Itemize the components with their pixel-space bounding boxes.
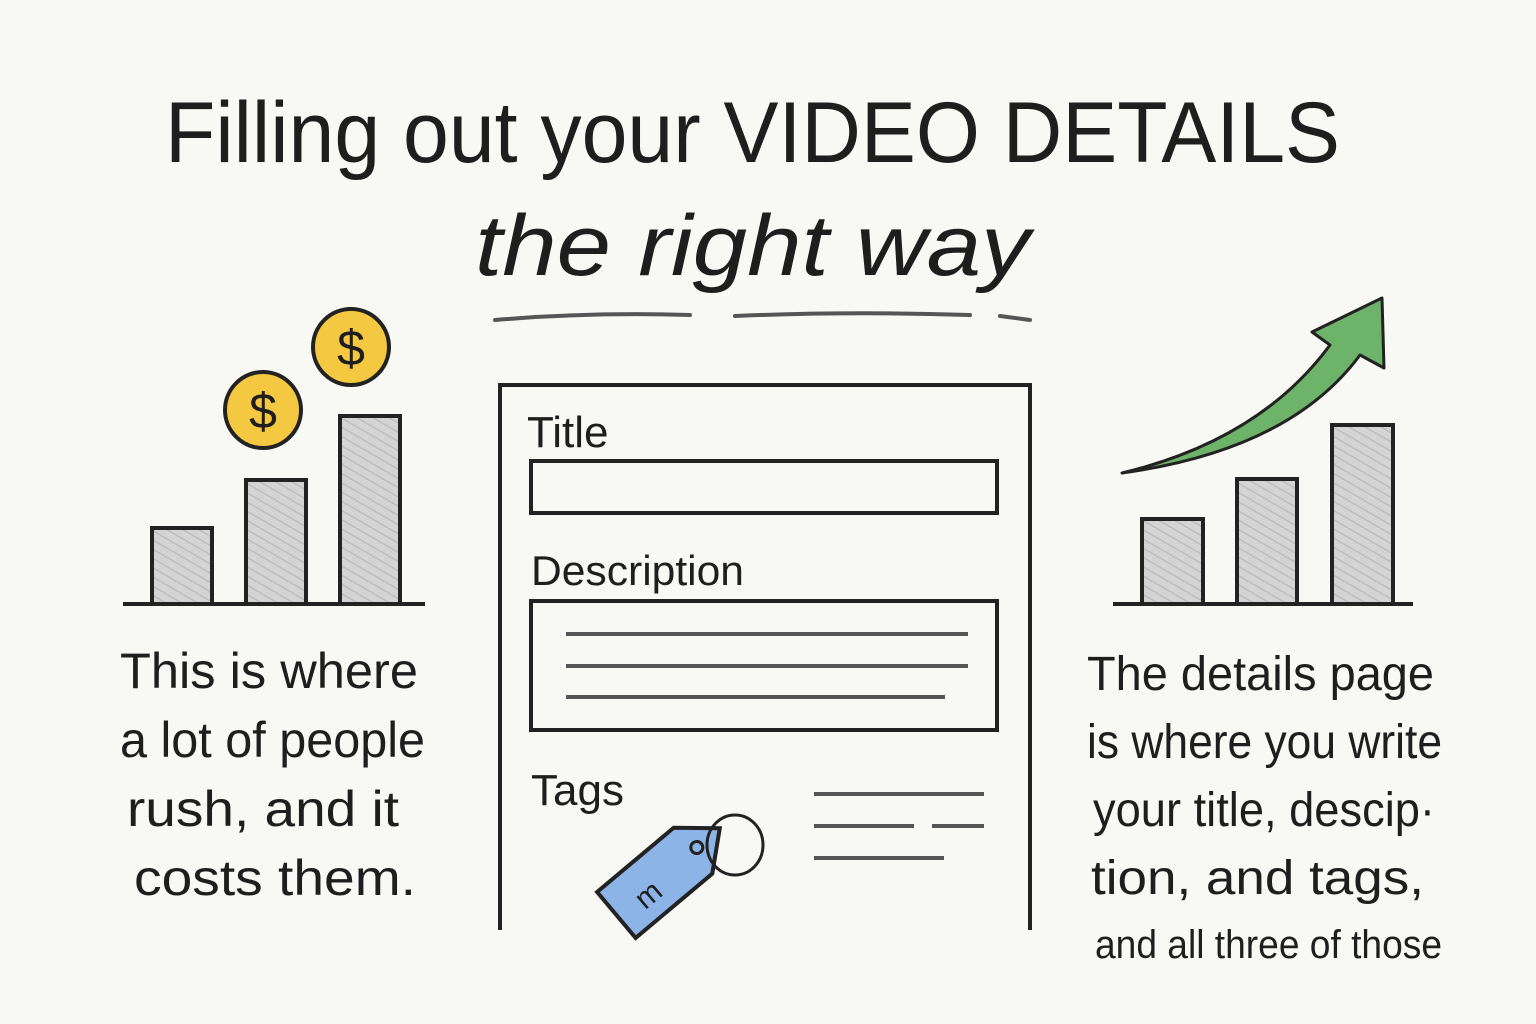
- icon: tag: [597, 805, 739, 938]
- right bar chart with arrow: [1113, 298, 1413, 604]
- description field: Description: [531, 547, 744, 594]
- left text: rush, and it: [127, 781, 399, 837]
- left text: a lot of people: [120, 712, 425, 768]
- left text: [120, 643, 425, 906]
- title field: [527, 408, 997, 513]
- icon: coin: $: [337, 320, 365, 376]
- icon: coin: $: [249, 383, 277, 439]
- tags field: [531, 766, 984, 938]
- title: Filling out your VIDEO DETAILS: [165, 85, 1340, 181]
- title field: Title: [527, 408, 608, 457]
- right text: your title, descip·: [1093, 784, 1435, 837]
- form panel: [500, 385, 1030, 938]
- left bar chart with coins: [123, 309, 425, 604]
- right text: [1087, 648, 1442, 967]
- right text: is where you write: [1087, 716, 1442, 769]
- title: the right way: [475, 198, 1036, 294]
- title: [165, 85, 1340, 294]
- right text: tion, and tags,: [1091, 852, 1424, 905]
- left text: costs them.: [134, 850, 416, 906]
- description field: [531, 547, 997, 730]
- icon: coin: [313, 309, 389, 385]
- icon: coin: [225, 372, 301, 448]
- icon: tag: m: [628, 874, 669, 916]
- icon: growth arrow: [1122, 298, 1384, 473]
- left text: This is where: [120, 643, 418, 699]
- right text: The details page: [1087, 648, 1434, 701]
- tags field: Tags: [531, 766, 624, 815]
- right text: and all three of those: [1095, 923, 1442, 967]
- title underline: [495, 313, 1030, 320]
